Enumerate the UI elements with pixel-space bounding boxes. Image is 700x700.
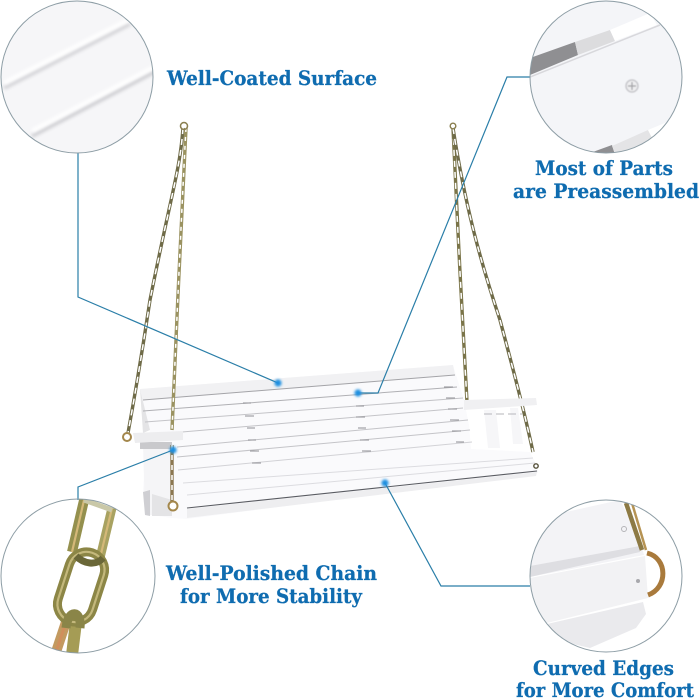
panel: curved edges detail <box>530 500 684 654</box>
seat and back <box>140 365 538 519</box>
leader line: well-coated surface <box>78 153 282 387</box>
heading: preassembled parts: Most of Parts <box>535 156 673 180</box>
slat lines <box>143 375 537 508</box>
leader line: polished chain <box>78 446 177 500</box>
right armrest supports <box>484 408 523 448</box>
bottom chain link <box>56 622 76 655</box>
armrests <box>133 398 537 443</box>
middle chain link <box>53 547 109 628</box>
heading: well-coated surface: Well-Coated Surface <box>166 66 377 90</box>
leader line: curved edges <box>381 479 530 586</box>
top chain link <box>72 496 112 558</box>
leader line: preassembled parts <box>354 77 530 397</box>
left post <box>140 389 172 516</box>
chains of the swing <box>123 122 538 510</box>
heading: curved edges: Curved Edges <box>533 656 674 680</box>
swing bench <box>140 365 538 519</box>
heading: polished chain: Well-Polished Chain <box>165 561 377 585</box>
panel: preassembled parts detail <box>530 0 684 160</box>
panel: well-coated surface detail <box>0 0 156 154</box>
heading: polished chain: for More Stability <box>180 584 363 608</box>
panel: polished chain detail <box>1 496 155 655</box>
